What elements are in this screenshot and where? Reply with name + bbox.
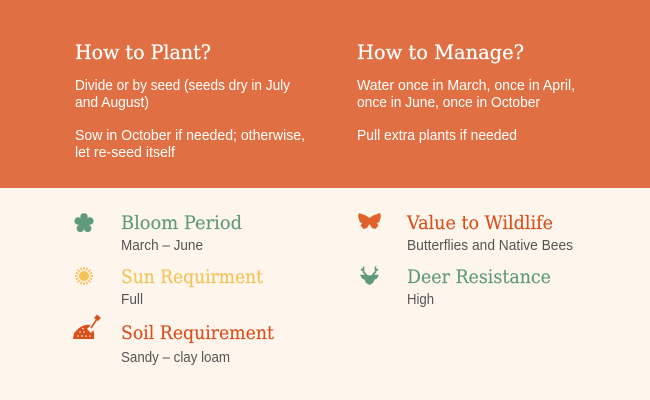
block: Soil Requirement: Sandy – clay loam — [121, 349, 230, 366]
block: Sun Requirment: Full — [121, 291, 143, 308]
block: Value to Wildlife: Value to Wildlife — [406, 213, 553, 234]
block: Bloom Period — [121, 213, 242, 254]
text: planting instructions: let re-seed itself — [75, 144, 176, 161]
block: Deer Resistance — [407, 267, 551, 308]
block: Sun Requirment — [121, 267, 264, 308]
text: management instructions: Water once in March, once in April, — [357, 77, 575, 94]
text: planting instructions — [75, 77, 305, 161]
block: Sun Requirment: Sun Requirment — [121, 267, 264, 288]
heading: How to Plant: How to Plant? — [75, 40, 211, 64]
icon: sun — [75, 267, 93, 285]
icon: shovel in soil — [73, 314, 101, 339]
block: Bloom Period: March – June — [121, 237, 203, 254]
block: Soil Requirement — [121, 323, 275, 366]
icon: flower — [74, 213, 94, 232]
text: management instructions — [357, 77, 575, 144]
icon: deer head — [360, 266, 379, 285]
heading: How to Manage: How to Manage? — [357, 40, 524, 64]
text: planting instructions: and August) — [75, 94, 149, 111]
icon: butterfly — [358, 213, 381, 229]
block: Bloom Period: Bloom Period — [121, 213, 242, 234]
block: Value to Wildlife — [406, 213, 573, 254]
text: management instructions: Pull extra plants if needed — [357, 127, 517, 144]
text: management instructions: once in June, once in October — [357, 94, 540, 111]
text: planting instructions: Sow in October if needed; otherwise, — [75, 127, 305, 144]
block: Value to Wildlife: Butterflies and Native Bees — [407, 237, 573, 254]
panel: orange planting and management header — [0, 0, 650, 188]
block: Soil Requirement: Soil Requirement — [121, 323, 275, 344]
text: planting instructions: Divide or by seed (seeds dry in July — [75, 77, 290, 94]
block: Deer Resistance: Deer Resistance — [407, 267, 551, 288]
block: Deer Resistance: High — [407, 291, 434, 308]
